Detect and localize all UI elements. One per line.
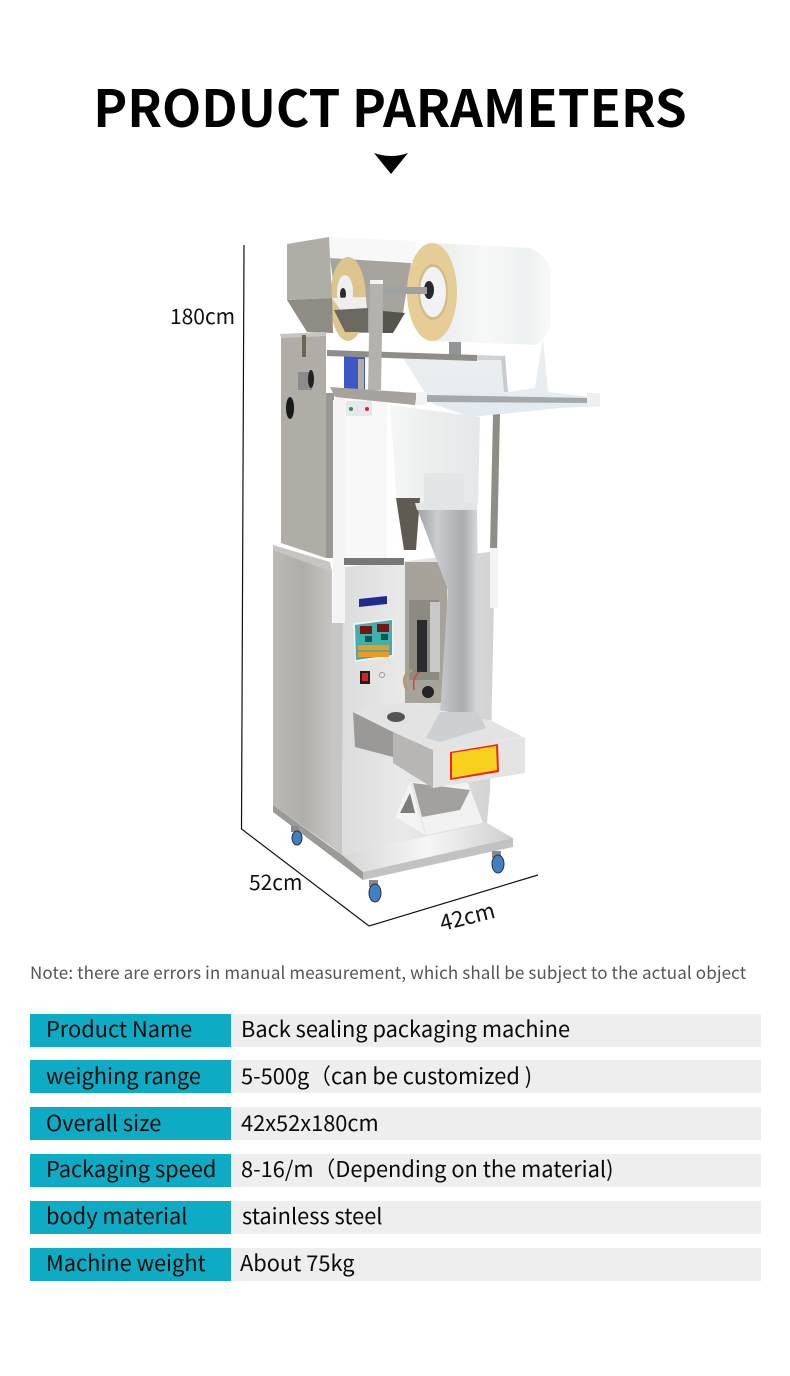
row: machine weight: Machine weight <box>46 1247 206 1278</box>
row: overall size: 42x52x180cm <box>241 1107 379 1138</box>
discharge chute <box>395 782 483 835</box>
row: machine weight: About 75kg <box>240 1247 355 1278</box>
roller bars <box>327 287 590 403</box>
sealing mechanism <box>404 600 440 698</box>
icon: down arrow <box>374 153 408 174</box>
row: packaging speed: Packaging speed <box>46 1153 216 1184</box>
row: overall size: Overall size <box>46 1107 161 1138</box>
caster wheels <box>291 826 504 902</box>
title: PRODUCT PARAMETERS <box>93 68 687 142</box>
dimension label: width: 42cm <box>436 893 498 938</box>
roller frame arm <box>330 280 600 405</box>
dimension lines <box>242 245 538 926</box>
row: body material: stainless steel <box>242 1200 382 1231</box>
row: product name: Back sealing packaging machine <box>241 1013 570 1044</box>
main film roll <box>407 243 551 358</box>
forming tube <box>396 473 478 713</box>
product illustration with dimensions <box>170 237 600 938</box>
row: body material <box>30 1200 761 1234</box>
row: product name: Product Name <box>46 1013 192 1044</box>
warning label <box>450 744 499 780</box>
row: weighing range <box>30 1060 761 1093</box>
white back panel <box>334 398 387 558</box>
drip tray <box>353 703 525 788</box>
row: body material: body material <box>46 1200 187 1231</box>
dimension label: height: 180cm <box>170 301 235 331</box>
note: Note: there are errors in manual measurement, which shall be subject to the actual object <box>30 959 746 984</box>
control panel <box>353 618 394 662</box>
upper scale panel <box>344 356 372 416</box>
far film roll <box>330 257 366 341</box>
row: weighing range: weighing range <box>46 1060 201 1091</box>
lower cabinet <box>273 400 498 855</box>
row: machine weight <box>30 1247 761 1281</box>
base plate <box>273 805 513 880</box>
control column <box>280 332 334 558</box>
row: overall size <box>30 1107 761 1140</box>
dimension label: depth: 52cm <box>249 867 302 897</box>
film backdrop <box>403 337 600 417</box>
row: packaging speed <box>30 1153 761 1187</box>
film sheet <box>390 405 480 505</box>
brand badge <box>359 596 387 607</box>
upright right post <box>490 414 500 552</box>
hopper <box>287 237 416 341</box>
row: product name <box>30 1013 761 1047</box>
row: packaging speed: 8-16/m（Depending on the material) <box>241 1153 614 1184</box>
power switch <box>360 671 384 684</box>
row: weighing range: 5-500g（can be customized ) <box>241 1060 532 1091</box>
